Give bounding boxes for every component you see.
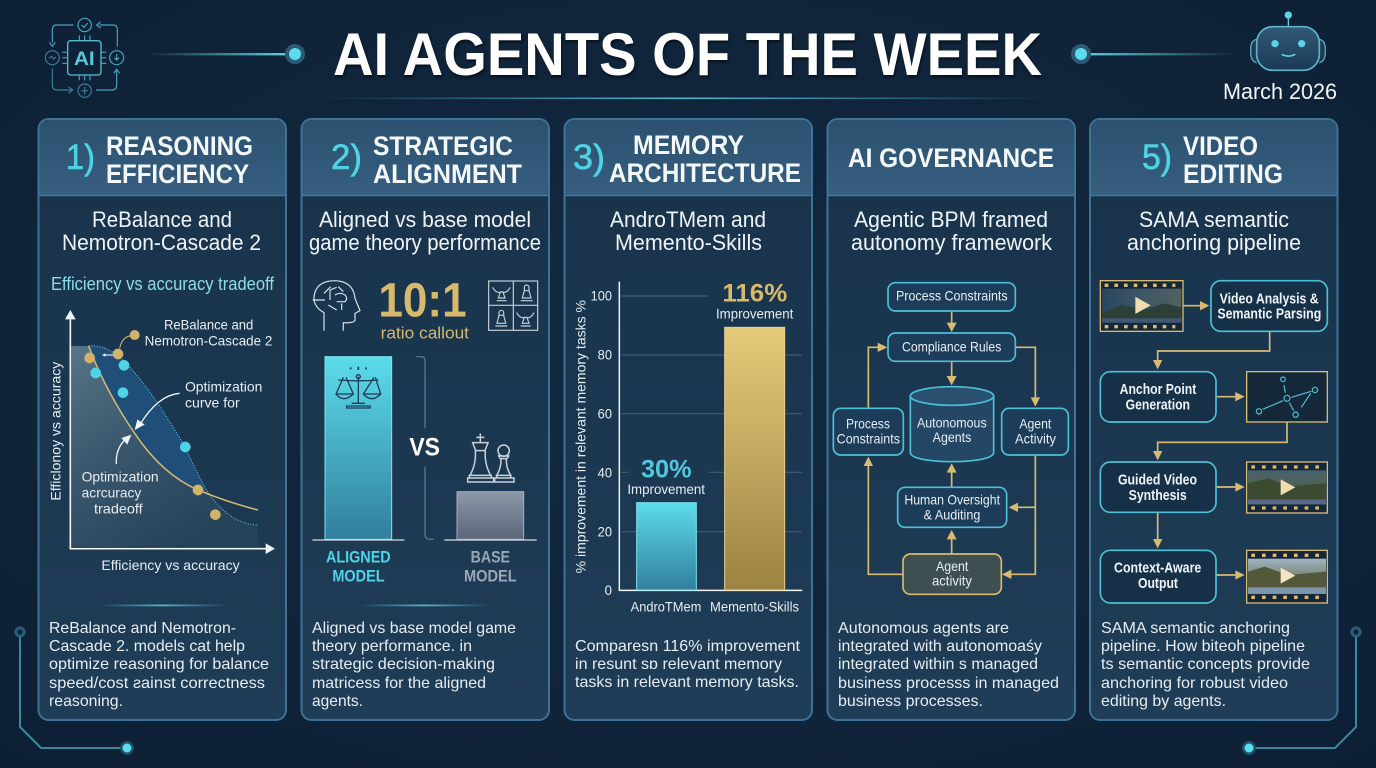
- description: theory performance. in: [312, 638, 472, 655]
- box: compliance rules: [888, 333, 1015, 361]
- header: video editing: [1090, 120, 1336, 196]
- film frame 1: [1100, 281, 1183, 331]
- base bar: [457, 492, 524, 539]
- description: [1101, 620, 1310, 710]
- chart title: Efficiency vs accuracy tradeoff: [51, 274, 275, 294]
- icon: strategy matrix: [489, 281, 538, 330]
- description: integrated with autonomoaśy: [838, 638, 1042, 655]
- date label: March 2026: [1223, 79, 1337, 104]
- panel: memory architecture: [564, 119, 812, 720]
- decorative circuit: bottom right: [1242, 628, 1360, 755]
- box: video analysis: Video Analysis &: [1220, 291, 1319, 307]
- bar chart: 80: [598, 346, 612, 362]
- box: video analysis: [1211, 281, 1327, 331]
- box: process constraints top: Process Constraints: [896, 288, 1008, 304]
- baseline left: [312, 538, 404, 542]
- tradeoff curve chart: curve for: [185, 394, 240, 410]
- box: context-aware output: Output: [1138, 576, 1178, 592]
- header: strategic alignment: 2): [331, 138, 362, 177]
- description: Comparesn 116% improvement: [575, 638, 801, 655]
- subtitle: anchoring pipeline: [1127, 230, 1301, 255]
- cylinder: autonomous agents: Agents: [933, 429, 971, 445]
- subtitle: [610, 207, 766, 255]
- tradeoff curve chart: Efficiency vs accuracy: [101, 557, 240, 573]
- baseline right: [444, 538, 537, 542]
- subtitle: Aligned vs base model: [319, 207, 531, 232]
- aligned bar: [325, 357, 392, 539]
- description: ts semantic concepts provide: [1101, 656, 1310, 673]
- subtitle: [309, 207, 541, 255]
- tradeoff curve chart: acrcuracy: [82, 484, 141, 500]
- tradeoff curve chart: tradeoff: [94, 500, 143, 516]
- anchor graph thumbnail: [1247, 372, 1327, 422]
- tradeoff curve chart: Optimization: [82, 469, 159, 485]
- description: matricess for the aligned: [312, 675, 486, 692]
- x axis labels: AndroTMem: [631, 598, 701, 614]
- header: memory architecture: [565, 120, 811, 196]
- header: strategic alignment: STRATEGIC: [373, 131, 513, 161]
- header: memory architecture: 3): [573, 138, 605, 177]
- ratio callout: ratio callout: [381, 323, 469, 342]
- ratio comparison graphic: [312, 274, 538, 586]
- film frame 3: [1247, 550, 1327, 603]
- header: video editing: EDITING: [1183, 159, 1283, 189]
- icon: brain head: [313, 281, 360, 331]
- description: optimize reasoning for balance: [49, 656, 269, 673]
- box: anchor point generation: [1100, 372, 1216, 422]
- description: strategic decision-making: [312, 656, 495, 673]
- header: memory architecture: ARCHITECTURE: [609, 158, 801, 188]
- label aligned model: [326, 548, 391, 586]
- label aligned model: MODEL: [332, 567, 385, 586]
- description: [575, 638, 801, 691]
- icon: chess king and pawn: [468, 433, 514, 482]
- box: agent activity bottom: Agent: [936, 558, 968, 574]
- subtitle: Memento-Skills: [615, 230, 762, 255]
- box: process constraints left: [833, 408, 903, 455]
- icon: AI chip with cycle: AI: [74, 49, 95, 70]
- description: [838, 620, 1059, 710]
- tradeoff curve chart: Efficlonoy vs accuracy: [47, 362, 63, 501]
- subtitle: game theory performance: [309, 230, 541, 255]
- subtitle: [1127, 207, 1301, 255]
- box: context-aware output: Context-Aware: [1114, 561, 1201, 577]
- description: editing by agents.: [1101, 693, 1226, 710]
- header: ai governance: AI GOVERNANCE: [848, 143, 1054, 173]
- connector: header left: [145, 44, 305, 64]
- connector: header right: [1071, 44, 1236, 64]
- divider: [360, 604, 490, 606]
- bar chart: 20: [598, 524, 612, 540]
- flow arrows: [864, 311, 1040, 579]
- box: agent activity right: Activity: [1015, 430, 1056, 446]
- divider: [98, 604, 228, 606]
- cylinder: autonomous agents: Autonomous: [917, 414, 987, 430]
- box: agent activity bottom: [903, 554, 1001, 594]
- bar chart: 60: [598, 405, 612, 421]
- box: human oversight: Human Oversight: [904, 492, 1000, 508]
- panel: strategic alignment: [302, 119, 549, 720]
- bar chart: % improvement in relevant memory tasks %: [572, 300, 588, 573]
- description: SAMA semantic anchoring: [1101, 620, 1290, 637]
- header: reasoning efficiency: REASONING: [106, 131, 253, 161]
- box: process constraints left: Constraints: [837, 430, 900, 446]
- description: business processs in managed: [838, 675, 1059, 692]
- header: reasoning efficiency: EFFICIENCY: [106, 159, 249, 189]
- label base model: [464, 548, 517, 586]
- bar: AndroTMem 30 percent: Improvement: [627, 481, 705, 497]
- header: video editing: VIDEO: [1183, 131, 1258, 161]
- description: [49, 620, 269, 710]
- box: human oversight: [898, 487, 1007, 527]
- label base model: BASE: [471, 548, 510, 567]
- description: reasoning.: [49, 693, 123, 710]
- header: video editing: 5): [1142, 138, 1172, 177]
- subtitle: [851, 207, 1053, 255]
- description: agents.: [312, 693, 363, 710]
- box: agent activity right: Agent: [1019, 416, 1051, 432]
- box: guided video synthesis: Guided Video: [1118, 472, 1197, 488]
- icon: AI chip with cycle: [45, 18, 124, 97]
- decorative circuit: bottom left: [16, 628, 134, 755]
- box: process constraints left: Process: [846, 416, 890, 432]
- header: memory architecture: MEMORY: [633, 130, 744, 160]
- governance flow diagram: [833, 283, 1068, 594]
- ratio callout: 10:1: [378, 274, 467, 328]
- description: in resunt sɒ relevant memory: [575, 656, 782, 673]
- description: integrated within s managed: [838, 656, 1038, 673]
- bar: AndroTMem 30 percent: [627, 455, 705, 590]
- subtitle: Agentic BPM framed: [854, 207, 1048, 232]
- subtitle: AndroTMem and: [610, 207, 766, 232]
- box: video analysis: Semantic Parsing: [1217, 307, 1321, 323]
- header: reasoning efficiency: [39, 120, 285, 196]
- bar chart: 0: [605, 582, 612, 598]
- bar: Memento-Skills 116 percent: 116%: [722, 280, 787, 308]
- box: anchor point generation: Generation: [1126, 397, 1190, 413]
- tradeoff curve chart: [47, 310, 275, 573]
- icon: robot: [1251, 11, 1325, 70]
- header: strategic alignment: ALIGNMENT: [373, 159, 522, 189]
- x axis labels: [631, 598, 799, 614]
- panel: ai governance: [828, 119, 1075, 720]
- icon: balance scale: [336, 367, 381, 408]
- label aligned model: ALIGNED: [326, 548, 391, 567]
- description: tasks in relevant memory tasks.: [575, 674, 799, 691]
- description: anchoring for robust video: [1101, 675, 1288, 692]
- cylinder: autonomous agents: [910, 387, 994, 462]
- box: anchor point generation: Anchor Point: [1120, 382, 1197, 398]
- title underline: [320, 98, 1050, 99]
- tradeoff curve chart: Optimization: [185, 379, 262, 395]
- video pipeline diagram: [1100, 281, 1327, 603]
- tradeoff curve chart: ReBalance and: [164, 316, 253, 332]
- description: ReBalance and Nemotron-: [49, 620, 236, 637]
- x axis labels: Memento-Skills: [710, 598, 799, 614]
- box: compliance rules: Compliance Rules: [902, 338, 1001, 354]
- bar chart: 40: [598, 464, 612, 480]
- box: context-aware output: [1100, 550, 1216, 603]
- description: Autonomous agents are: [838, 620, 1009, 637]
- tradeoff curve chart: Nemotron-Cascade 2: [145, 333, 273, 349]
- description: speed/cost ƨainst correctness: [49, 675, 265, 692]
- header: strategic alignment: [302, 120, 548, 196]
- box: agent activity bottom: activity: [932, 572, 972, 588]
- bar chart: [572, 280, 802, 614]
- description: Aligned vs base model game: [312, 620, 516, 637]
- bracket and versus: VS: [409, 434, 440, 462]
- description: [312, 620, 516, 710]
- box: human oversight: & Auditing: [924, 506, 980, 522]
- bar chart: 100: [591, 288, 612, 304]
- panel: reasoning efficiency: [38, 119, 286, 720]
- bracket and versus: [409, 357, 440, 539]
- bar: Memento-Skills 116 percent: Improvement: [716, 305, 793, 321]
- subtitle: Nemotron-Cascade 2: [62, 230, 261, 255]
- description: Cascade 2. models cat help: [49, 638, 245, 655]
- description: business processes.: [838, 693, 983, 710]
- panel: video editing: [1090, 119, 1338, 720]
- box: agent activity right: [1002, 408, 1068, 455]
- bar: Memento-Skills 116 percent: [716, 280, 793, 590]
- film frame 2: [1247, 462, 1327, 513]
- subtitle: [62, 207, 261, 255]
- header: reasoning efficiency: 1): [66, 138, 95, 177]
- description: pipeline. How biteoh pipeline: [1101, 638, 1305, 655]
- box: process constraints top: [888, 283, 1015, 311]
- bar: AndroTMem 30 percent: 30%: [641, 455, 692, 483]
- box: guided video synthesis: [1100, 462, 1216, 512]
- subtitle: SAMA semantic: [1139, 207, 1289, 232]
- subtitle: ReBalance and: [92, 207, 232, 232]
- subtitle: autonomy framework: [851, 230, 1053, 255]
- pipeline arrows: [1153, 301, 1287, 580]
- header: ai governance: [828, 120, 1074, 196]
- box: guided video synthesis: Synthesis: [1129, 488, 1187, 504]
- label base model: MODEL: [464, 567, 517, 586]
- title: AI AGENTS OF THE WEEK: [333, 21, 1042, 88]
